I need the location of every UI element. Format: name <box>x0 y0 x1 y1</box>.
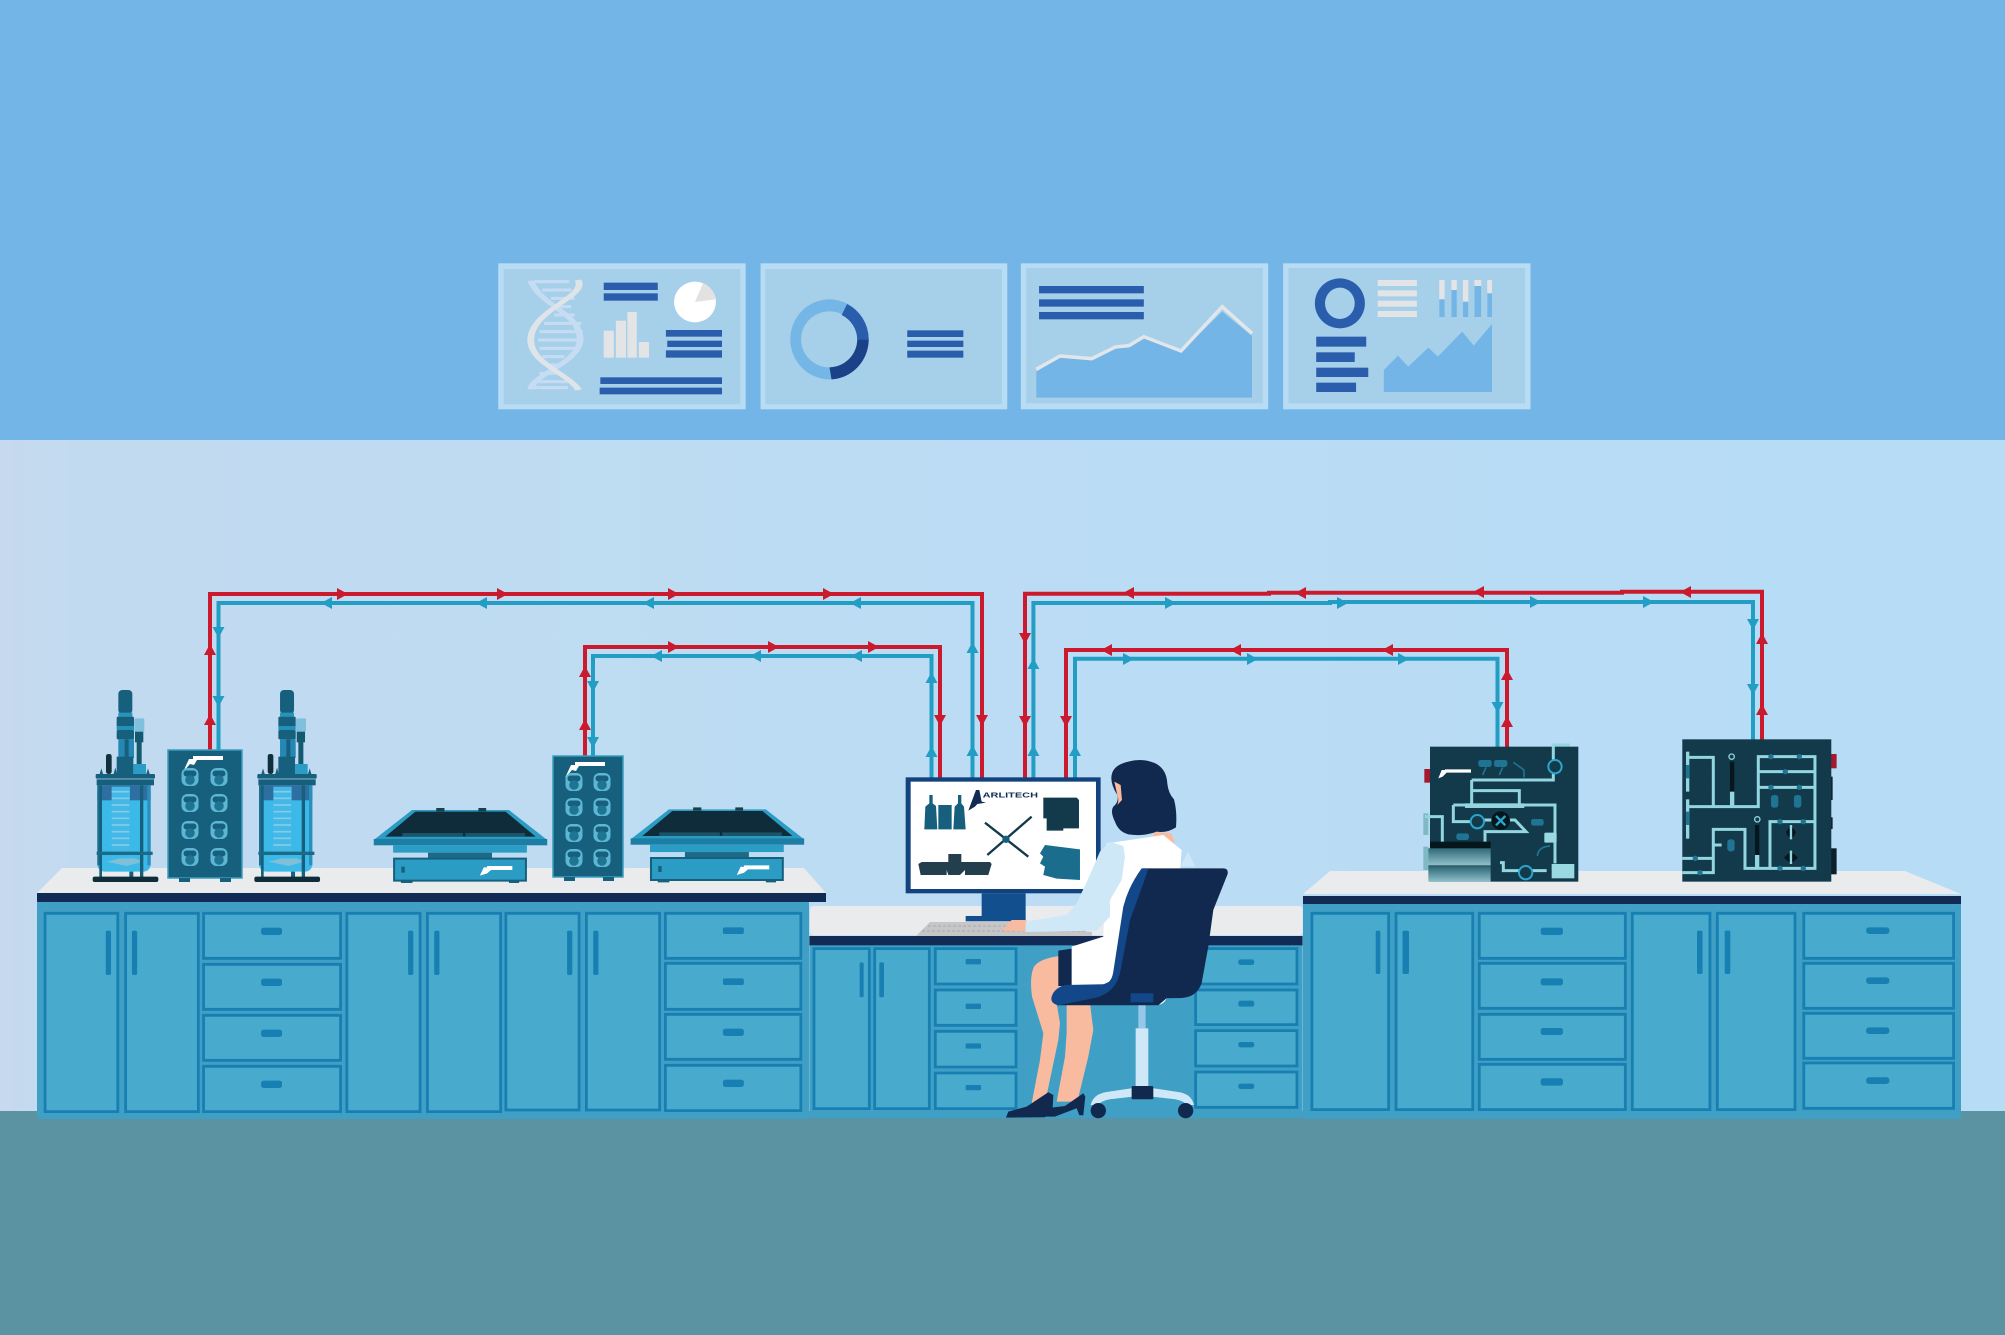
doors and drawers <box>1312 913 1954 1110</box>
area chart <box>1036 307 1252 398</box>
background: floor <box>0 1111 2005 1335</box>
panel: DNA and charts <box>498 263 746 409</box>
hair <box>1111 760 1176 835</box>
worktop <box>1303 871 1961 894</box>
monitor <box>906 777 1101 921</box>
shoes <box>1006 1092 1085 1118</box>
background: sky band <box>0 0 2005 440</box>
chair column <box>1136 1002 1148 1087</box>
hand <box>1002 920 1027 931</box>
doors and drawers <box>814 949 1297 1109</box>
chair seat and back <box>1051 868 1228 1005</box>
text lines <box>1039 286 1144 319</box>
pie chart <box>674 282 716 322</box>
flow arrows: blue <box>212 596 1759 757</box>
shaker platform 2 <box>631 807 804 882</box>
text lines <box>1316 337 1368 392</box>
legs <box>1031 956 1093 1103</box>
base cabinet <box>809 943 1303 1118</box>
background: lab wall <box>0 440 2005 1112</box>
coat tail behind chair <box>1180 852 1195 867</box>
face <box>1114 782 1122 805</box>
lab coat <box>1072 835 1182 987</box>
process skid A <box>1423 745 1578 882</box>
skirt <box>1058 948 1073 986</box>
control box 1 <box>168 750 242 882</box>
doors and drawers <box>45 913 801 1112</box>
bioreactor right <box>254 690 320 882</box>
left bench <box>37 868 826 1119</box>
worktop edge <box>809 936 1303 945</box>
base cabinet <box>1303 900 1961 1119</box>
panel: mixed charts <box>1283 263 1531 409</box>
keyboard <box>916 922 1092 936</box>
flow arrows: red <box>204 586 1768 730</box>
shaker platform 1 <box>374 808 547 883</box>
scientist and chair <box>1002 760 1228 1118</box>
process skid B <box>1682 739 1837 882</box>
middle bench <box>809 906 1303 1118</box>
right bench <box>1303 871 1961 1119</box>
donut ring <box>1315 278 1365 328</box>
dashboard panels row <box>498 263 1531 409</box>
bar chart <box>604 312 649 358</box>
base cabinet <box>37 900 809 1119</box>
pipes: left outer loop <box>210 594 982 778</box>
pipes: left inner loop <box>585 647 940 778</box>
area chart <box>1384 324 1492 392</box>
text lines <box>907 330 963 358</box>
panel: area chart <box>1021 263 1268 409</box>
screen icons: ARLITECH <box>983 792 1038 799</box>
text lines <box>600 330 722 394</box>
donut chart <box>790 299 869 379</box>
worktop <box>810 906 1303 935</box>
text lines <box>1378 280 1417 317</box>
screen icons <box>918 790 1080 880</box>
sleeve <box>1026 842 1125 932</box>
pipes: right outer loop <box>1025 592 1762 778</box>
control box 2 <box>553 756 623 881</box>
worktop edge <box>1303 896 1961 904</box>
stacked bars <box>1439 280 1492 317</box>
panel: donut chart <box>761 263 1007 409</box>
neck <box>1153 832 1175 843</box>
chair base <box>1091 1086 1194 1118</box>
text lines <box>604 283 658 301</box>
icon: DNA helix <box>531 280 583 390</box>
worktop <box>37 868 826 893</box>
worktop edge <box>37 893 826 902</box>
bioreactor left <box>93 690 158 882</box>
pipes: right inner loop <box>1066 650 1507 778</box>
